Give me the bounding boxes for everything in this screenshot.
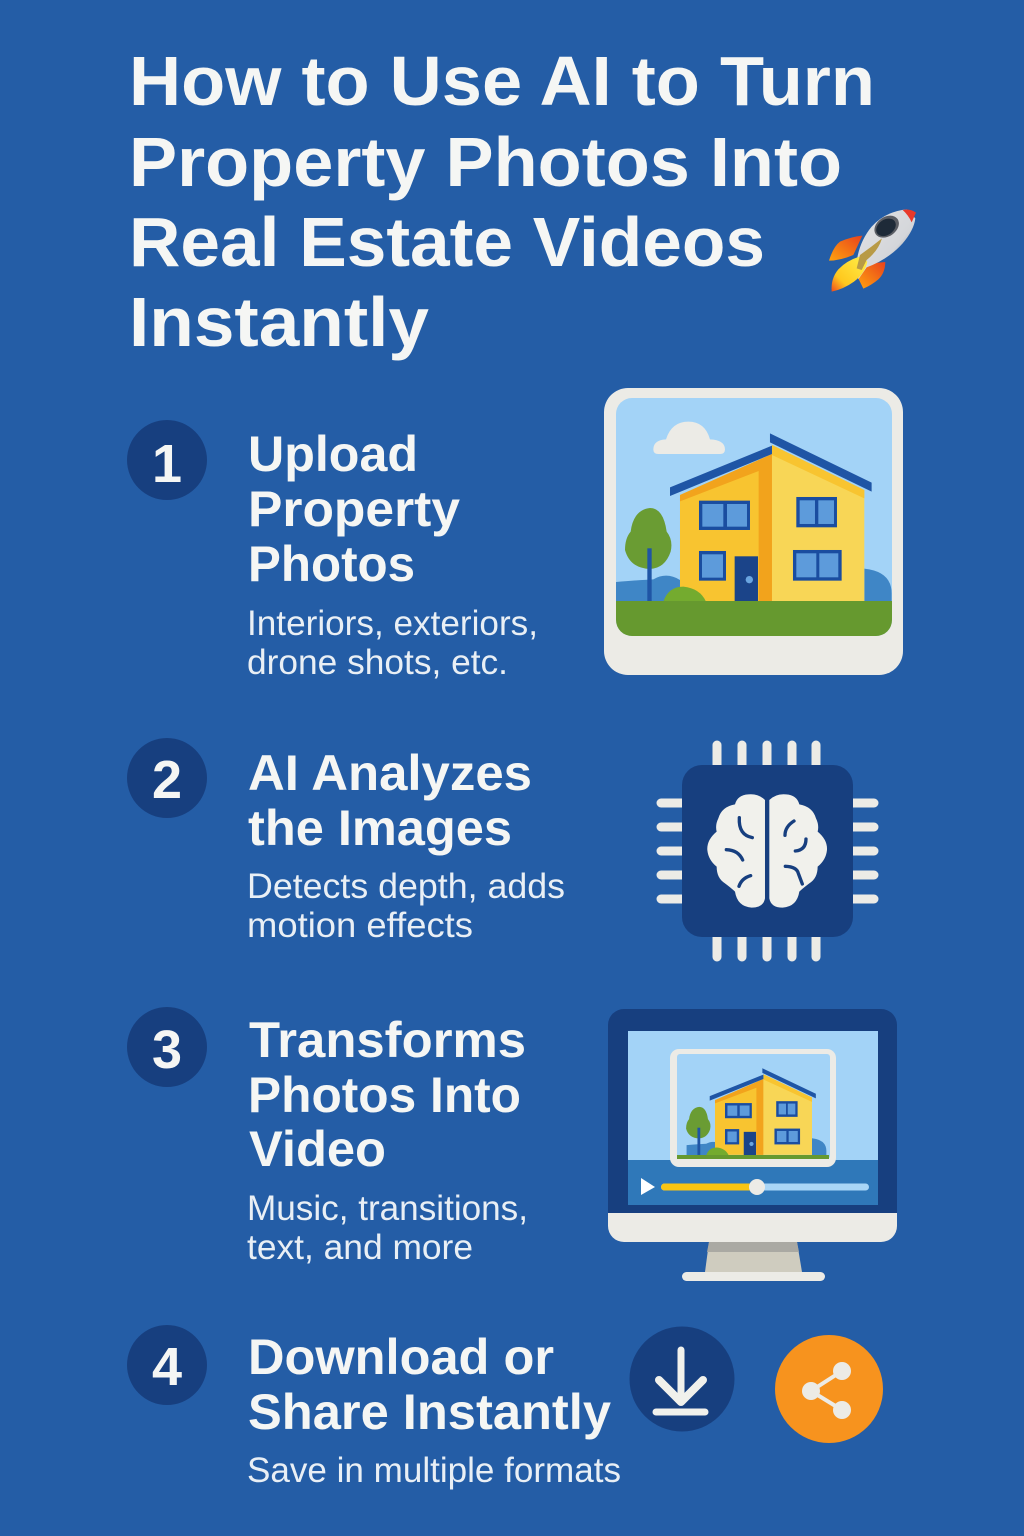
step 1 heading: Property — [248, 481, 460, 537]
step 1 description — [247, 604, 538, 682]
step 2 description: Detects depth, adds — [247, 867, 565, 906]
step 2 description — [247, 867, 565, 945]
video frame — [670, 1049, 836, 1167]
icon: property photo — [604, 388, 903, 675]
step 4 number badge: 4 — [152, 1337, 182, 1397]
title — [129, 42, 875, 361]
play button — [641, 1178, 655, 1195]
title: Property Photos Into — [129, 123, 842, 201]
step 3 description — [247, 1189, 528, 1267]
step 3 number badge — [127, 1007, 207, 1087]
step 4 heading: Share Instantly — [248, 1384, 611, 1440]
icon: share — [775, 1335, 883, 1443]
step 2 heading: AI Analyzes — [248, 745, 532, 801]
step 3 number badge: 3 — [152, 1020, 182, 1080]
lawn — [616, 601, 892, 636]
icon: rocket — [829, 209, 916, 292]
step 4 — [127, 1325, 883, 1490]
step 3 heading: Transforms — [249, 1012, 526, 1068]
step 2 number badge — [127, 738, 207, 818]
step 4 number badge — [127, 1325, 207, 1405]
step 3 heading — [248, 1012, 526, 1177]
step 1 number badge — [127, 420, 207, 500]
step 2 — [127, 738, 874, 957]
icon: desktop monitor playing video — [608, 1009, 897, 1281]
title: How to Use AI to Turn — [129, 42, 875, 120]
step 4 description: Save in multiple formats — [247, 1451, 621, 1490]
step 1 heading — [248, 426, 460, 592]
step 3 description: Music, transitions, — [247, 1189, 528, 1228]
brain — [707, 794, 827, 908]
step 3 heading: Video — [249, 1121, 386, 1177]
step 3 description: text, and more — [247, 1228, 473, 1267]
step 2 heading — [248, 745, 532, 856]
step 1 description: Interiors, exteriors, — [247, 604, 538, 643]
step 2 heading: the Images — [248, 800, 512, 856]
step 4 heading — [248, 1329, 611, 1440]
icon: AI chip with brain — [661, 745, 874, 957]
title: Instantly — [129, 283, 429, 361]
step 3 heading: Photos Into — [248, 1067, 521, 1123]
step 4 heading: Download or — [248, 1329, 554, 1385]
step 1 — [127, 388, 903, 682]
step 1 number badge: 1 — [152, 434, 182, 494]
step 1 description: drone shots, etc. — [247, 643, 508, 682]
step 1 heading: Photos — [248, 536, 415, 592]
title: Real Estate Videos — [129, 203, 765, 281]
progress slider — [661, 1179, 869, 1195]
step 2 number badge: 2 — [152, 750, 182, 810]
house illustration — [616, 422, 892, 602]
step 2 description: motion effects — [247, 906, 473, 945]
step 1 heading: Upload — [248, 426, 418, 482]
step 3 — [127, 1007, 897, 1281]
icon: download — [630, 1326, 734, 1432]
